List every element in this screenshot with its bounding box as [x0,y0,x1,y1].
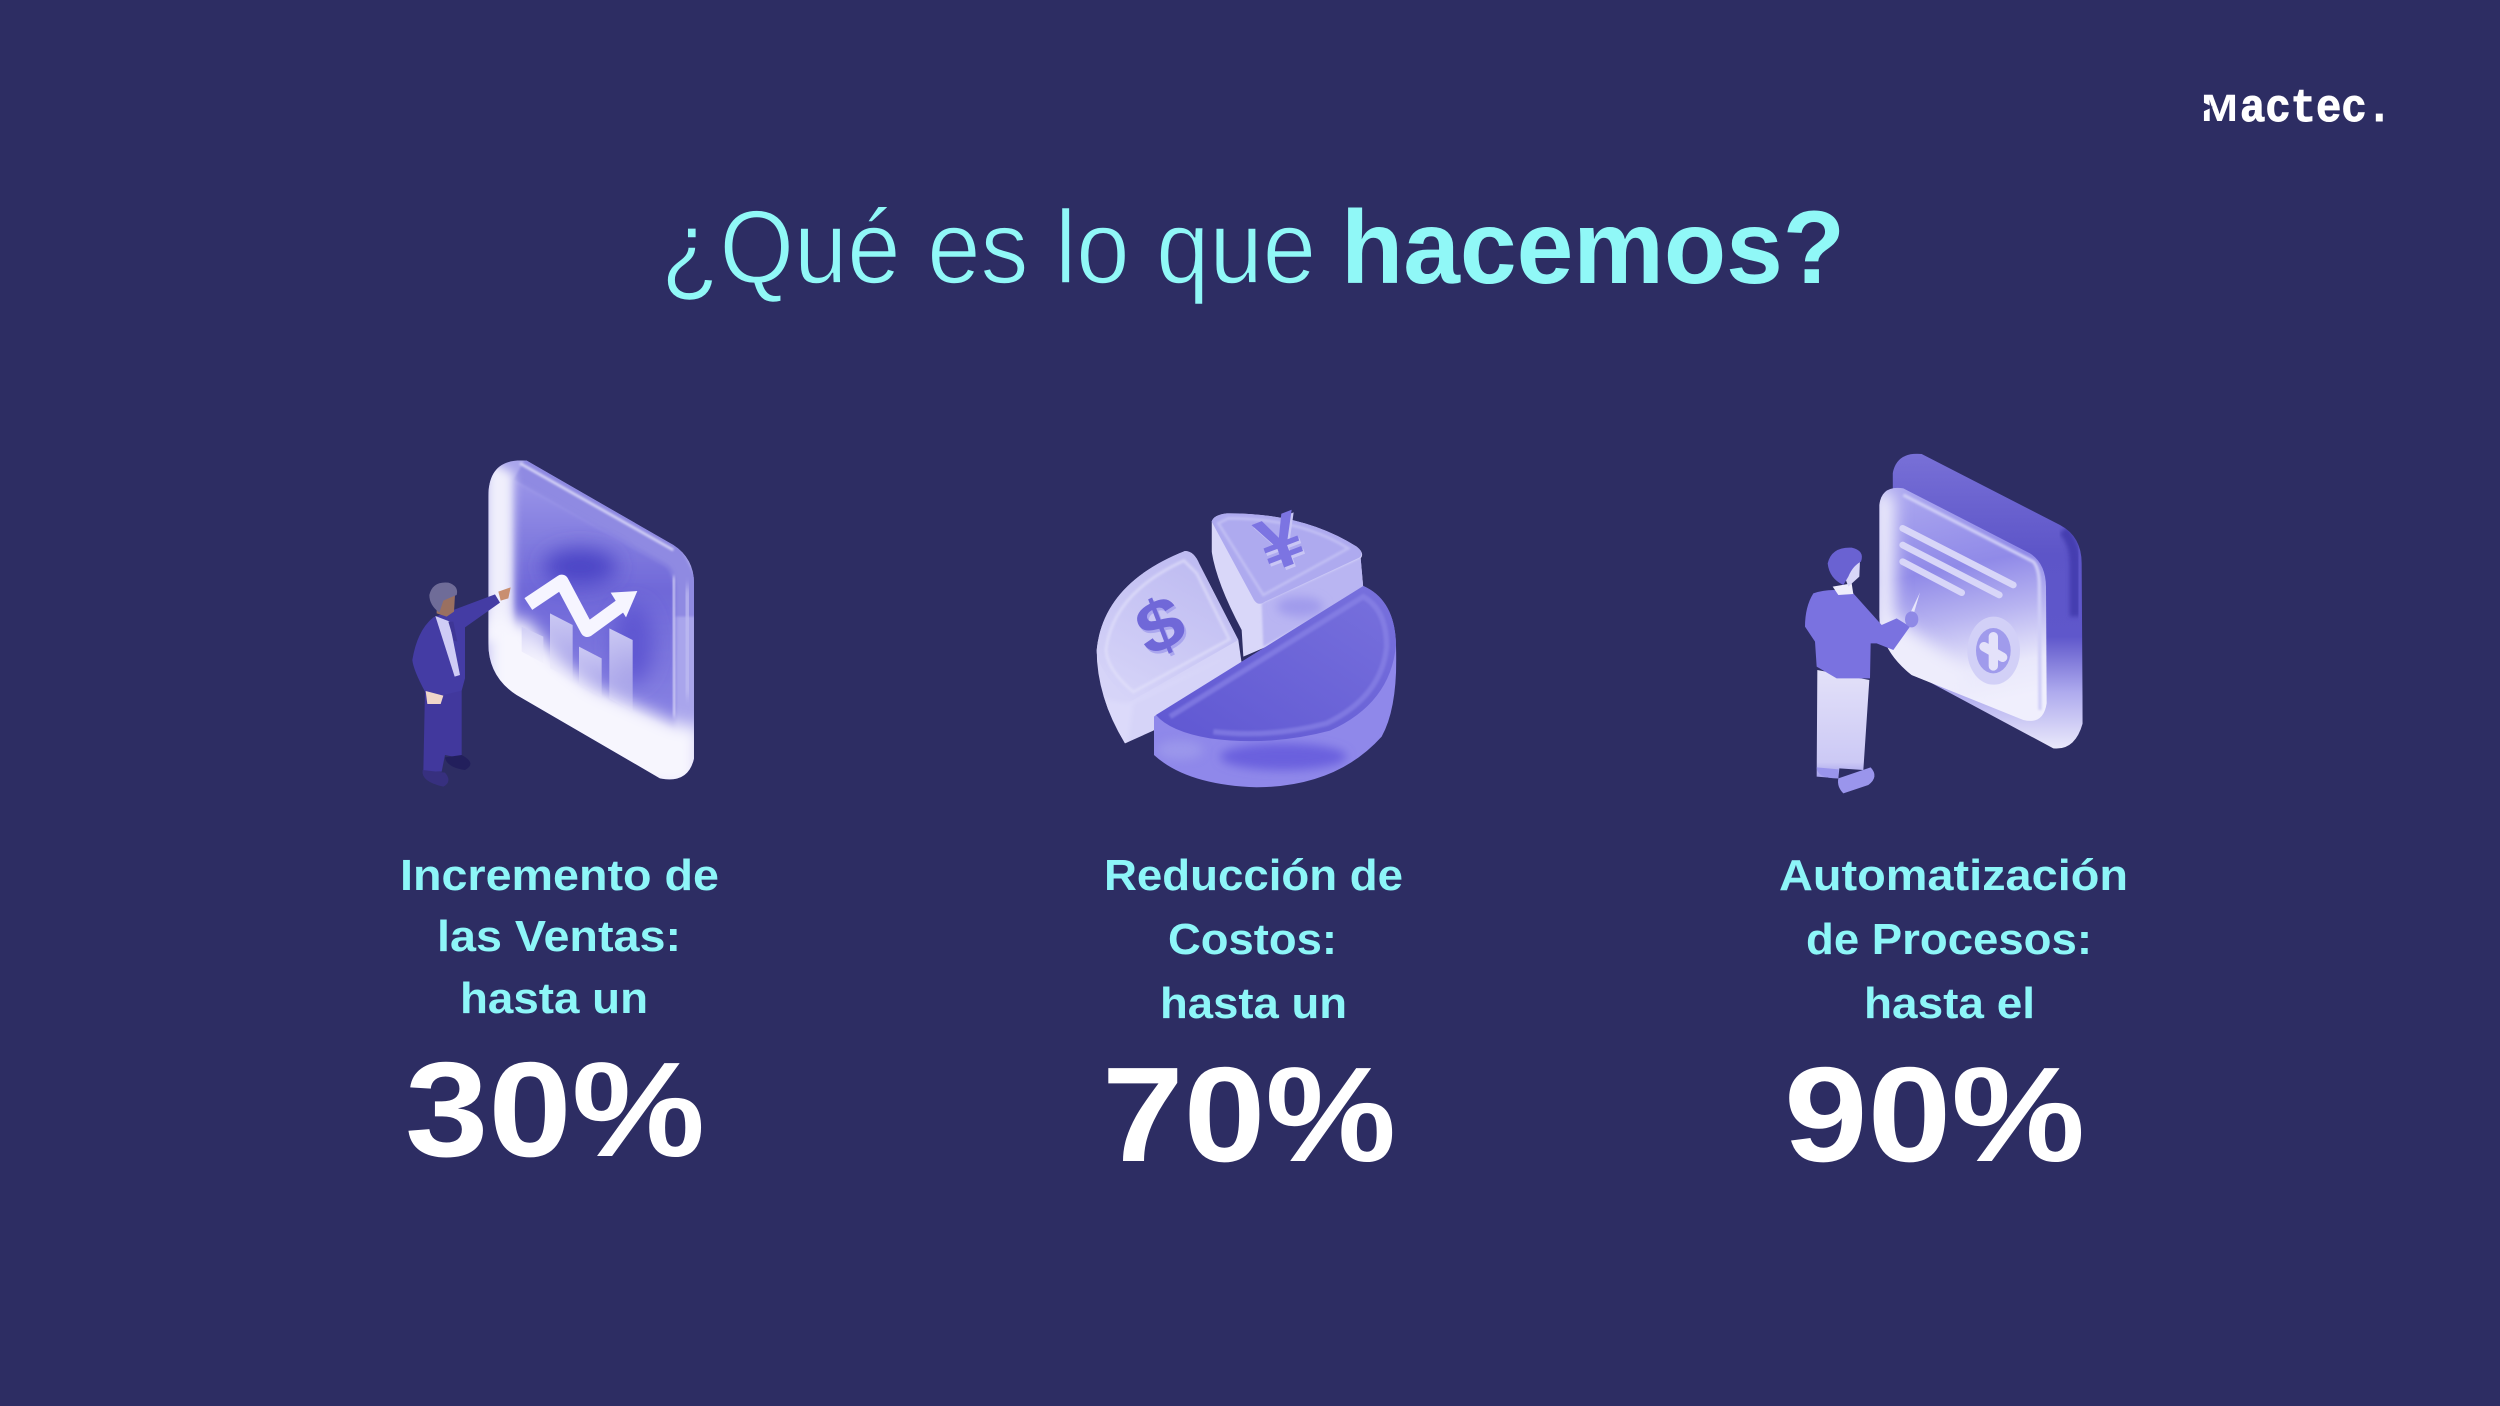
title: ¿Qué es lo que [661,190,1316,306]
stat: costos: Reducción de [1104,851,1403,900]
stat: ventas: 30% [405,1034,705,1185]
slice: dollar [1096,551,1242,744]
icon: yen sign: ¥ [1248,498,1318,592]
icon: plus circle [1967,617,2020,685]
slice: yen: ¥ [1246,495,1316,589]
illustration: person at document panel [1805,447,2087,793]
illustration: glass pie chart [1096,510,1396,788]
title: hacemos? [1341,190,1845,306]
logo: mactec: actec. [2240,83,2392,135]
logo: mactec: M [2201,88,2238,130]
slice: dollar: $ [1125,578,1195,673]
stat: procesos: hasta el [1864,979,2035,1028]
text lines [1903,528,2013,595]
stat: procesos: 90% [1784,1039,2085,1190]
slice: yen [1212,510,1364,656]
pointer [1908,592,1920,618]
icon: dollar sign: $ [1127,581,1197,675]
slice: large [1150,580,1403,793]
bars [522,613,633,712]
panel: glass board [488,460,694,780]
stat: procesos: Automatización [1779,851,2128,900]
illustration: man pointing at growth chart panel [412,450,707,790]
stat: costos: 70% [1102,1039,1396,1190]
stat: procesos [1779,851,2128,1190]
stat: costos: Costos: [1168,915,1337,964]
stat: ventas [400,851,719,1185]
stat: ventas: Incremento de [400,851,719,900]
stat: ventas: las Ventas: [437,912,681,961]
panel: front document [1873,487,2047,721]
stat: ventas: hasta un [460,974,648,1023]
stat: costos: hasta un [1160,979,1347,1028]
arrow: growth [528,582,637,630]
man in suit [412,582,511,787]
title [661,190,1845,306]
panel: back plate [1887,447,2087,753]
stat: procesos: de Procesos: [1806,915,2092,964]
person from behind [1805,548,1918,793]
stat: costos [1102,851,1403,1190]
